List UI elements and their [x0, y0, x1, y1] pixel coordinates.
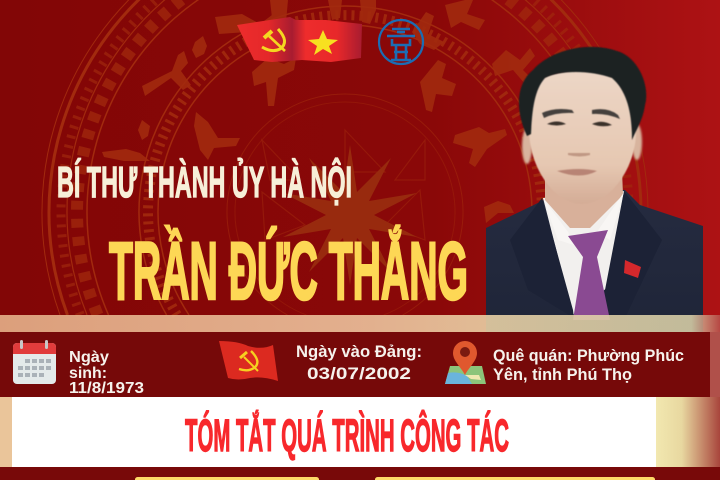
- birth date: Ngày: [69, 349, 109, 366]
- eyebrows: [542, 109, 620, 119]
- collar: [543, 192, 624, 245]
- location pin icon: [445, 341, 486, 384]
- left margin strip: [0, 397, 12, 467]
- birth date: [69, 349, 144, 397]
- neck: [545, 170, 623, 228]
- yellow star: [308, 30, 338, 55]
- bottom dark strip: [0, 467, 720, 480]
- party admission date: 03/07/2002: [307, 365, 411, 383]
- calendar icon: [13, 340, 56, 384]
- hometown: [493, 347, 684, 384]
- central star: [283, 145, 417, 285]
- portrait: [486, 47, 703, 332]
- tie: [568, 230, 610, 320]
- peach band: [0, 315, 720, 332]
- title line 1: BÍ THƯ THÀNH ỦY HÀ NỘI: [57, 156, 352, 207]
- birth date: sinh:: [69, 365, 107, 382]
- mouth: [557, 169, 597, 176]
- hometown: Yên, tỉnh Phú Thọ: [493, 366, 632, 384]
- right margin of info bar: [710, 332, 720, 397]
- bronze drum emblem: [42, 0, 648, 315]
- right yellow card: [375, 477, 655, 480]
- left yellow card: [135, 477, 319, 480]
- eyes: [547, 122, 612, 126]
- ear right: [632, 124, 642, 160]
- drum birds and deer: [102, 0, 535, 223]
- hammer and sickle: [262, 29, 285, 51]
- lapels: [510, 191, 662, 318]
- flags: party and national: [237, 17, 362, 62]
- party admission date: Ngày vào Đảng:: [296, 343, 422, 361]
- hanoi logo: [379, 20, 423, 64]
- nose: [568, 153, 590, 156]
- party admission date: [296, 343, 422, 383]
- birth date: 11/8/1973: [69, 380, 144, 397]
- suit: [486, 190, 703, 332]
- right margin strip: [656, 397, 720, 467]
- face: [529, 71, 636, 204]
- hair: [519, 47, 646, 140]
- shirt: [543, 191, 624, 315]
- party flag icon: [219, 341, 278, 381]
- ear left: [522, 128, 532, 164]
- section heading panel: [12, 397, 656, 467]
- info bar: [0, 332, 710, 397]
- hometown: Quê quán: Phường Phúc: [493, 347, 684, 365]
- lapel pin: [624, 260, 641, 278]
